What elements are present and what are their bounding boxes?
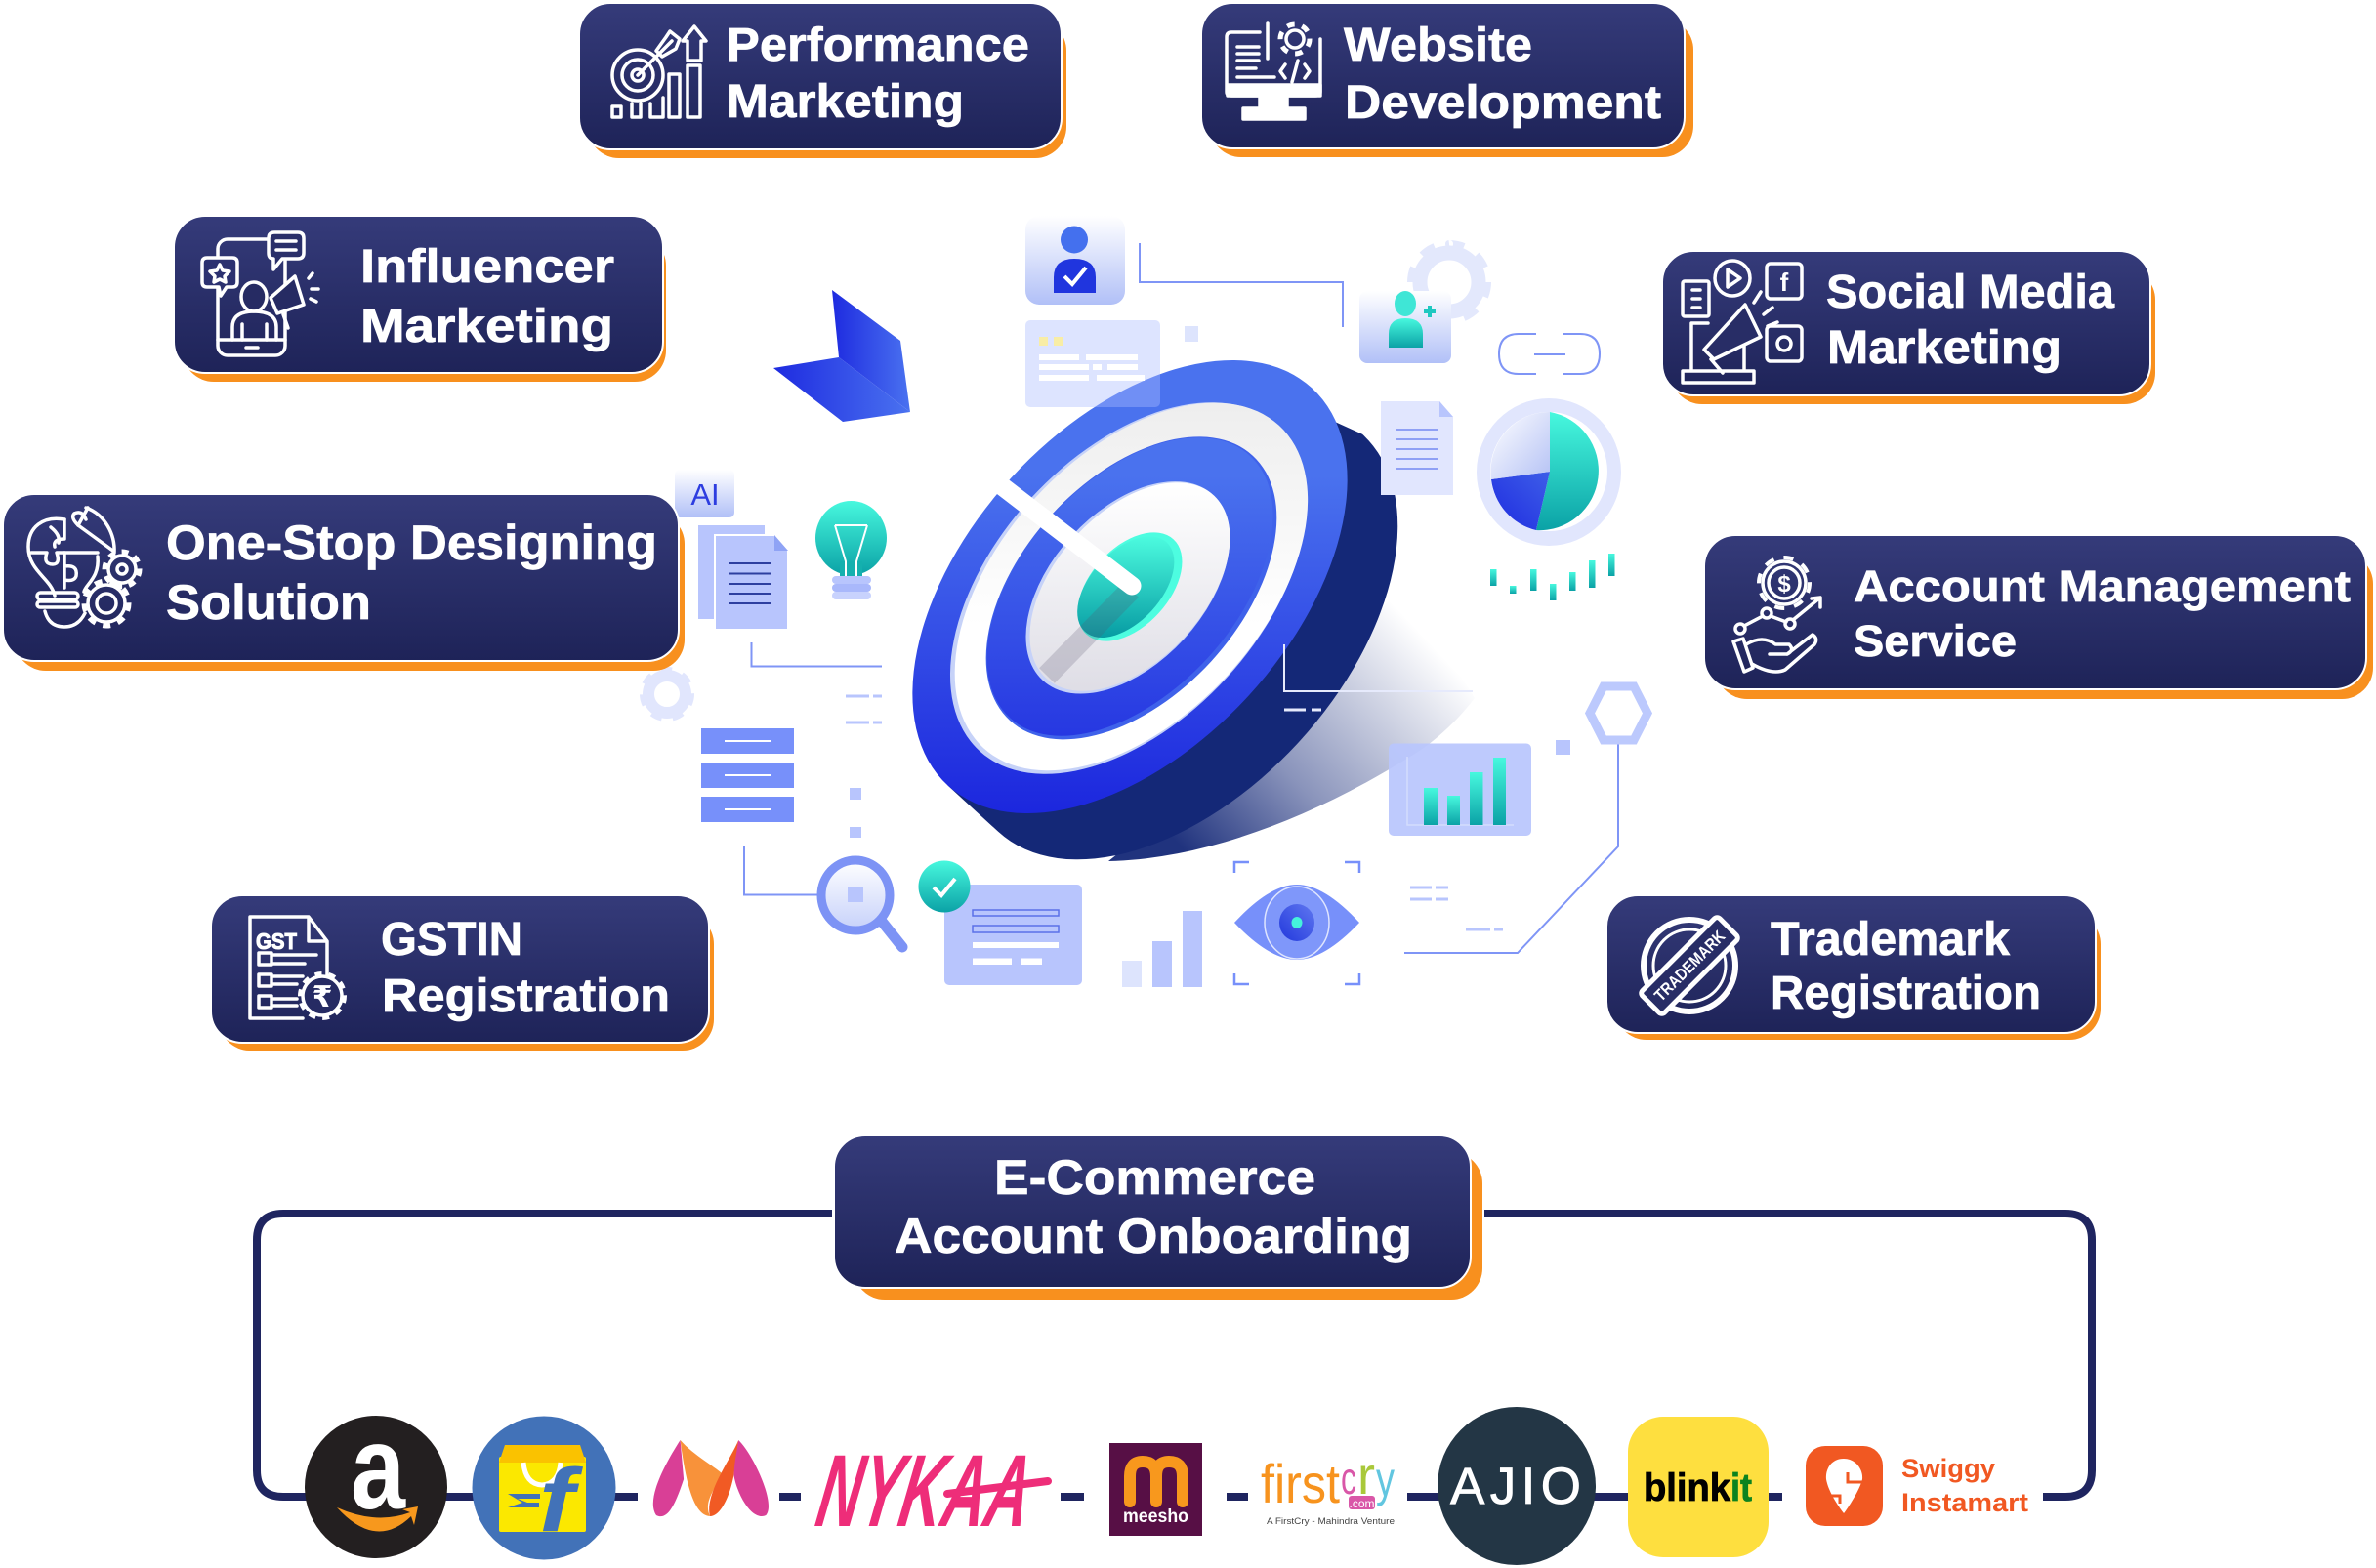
panel: Trademark Registration — [1606, 895, 2101, 1040]
connector lines — [744, 243, 1618, 953]
logo: Meesho — [1109, 1443, 1202, 1536]
heading line 2: Registration — [1771, 968, 2041, 1019]
small teal bars — [1490, 554, 1615, 600]
logo: Amazon: a — [351, 1401, 406, 1534]
panel: Account Management Service — [1704, 535, 2373, 699]
heading: GSTIN — [381, 914, 522, 966]
heading: One-Stop Designing — [166, 516, 657, 570]
small square — [1185, 326, 1198, 342]
panel: E-Commerce Account Onboarding — [834, 1135, 1482, 1300]
pie chart — [1477, 398, 1621, 546]
icon: hexagon — [1590, 686, 1647, 740]
icon: phone influencer with megaphone — [202, 232, 318, 355]
info card overlapping target — [1025, 320, 1160, 407]
logo: Nykaa: NYKAA — [810, 1434, 1041, 1548]
icon: magnifier — [821, 860, 902, 947]
heading line 2: Marketing — [1827, 322, 2062, 374]
logo: Amazon — [305, 1401, 447, 1558]
AI chip: AI — [690, 477, 720, 512]
logo: Flipkart: f — [539, 1451, 584, 1550]
icon: check badge — [918, 861, 971, 912]
heading: Social Media — [1826, 267, 2114, 318]
logo: FirstCry: r — [1357, 1447, 1375, 1506]
AI chip — [675, 470, 734, 517]
logo: Swiggy Instamart: Instamart — [1901, 1488, 2028, 1517]
icon: verified user card — [1025, 216, 1125, 305]
logo: FirstCry: .com — [1349, 1497, 1375, 1510]
form card — [944, 885, 1082, 985]
icon: eye with focus brackets — [1234, 862, 1359, 984]
icon: account growth in hand — [1733, 557, 1820, 672]
panel: Social Media Marketing — [1662, 251, 2155, 404]
gear top right — [1411, 244, 1487, 320]
logo: AJIO: AJIO — [1450, 1458, 1581, 1515]
logo: Myntra — [653, 1440, 769, 1516]
panel: One-Stop Designing Solution — [3, 494, 685, 671]
heading: E-Commerce — [994, 1150, 1315, 1205]
panel: Website Development — [1201, 3, 1693, 157]
logo: Swiggy Instamart — [1806, 1446, 2028, 1526]
panel: GSTIN Registration — [211, 895, 714, 1051]
icon: monitor with code — [1227, 23, 1320, 119]
heading line 2: Registration — [382, 970, 670, 1022]
logo: Nykaa — [810, 1434, 1048, 1548]
icon: social megaphone — [1683, 261, 1802, 383]
logo: Meesho: meesho — [1123, 1506, 1188, 1527]
connector frame around e-commerce logos — [257, 1214, 2092, 1497]
heading: Account Management — [1854, 561, 2351, 611]
panel: Performance Marketing — [579, 3, 1066, 158]
folded blue book — [773, 290, 910, 422]
icon: trademark stamp: TRADEMARK — [1650, 927, 1730, 1005]
icon: document right — [1381, 401, 1453, 495]
central target illustration — [829, 279, 1481, 940]
icon symbol: dollar: $ — [1777, 571, 1791, 598]
arrow shaft shadow — [1047, 590, 1131, 676]
icon symbol: rupee: ₹ — [313, 981, 332, 1013]
heading line 2: Account Onboarding — [895, 1209, 1412, 1263]
logo: Swiggy Instamart: Swiggy — [1901, 1454, 1995, 1483]
icon: add user card — [1359, 291, 1451, 363]
stacked list bars — [701, 728, 794, 822]
heading: Trademark — [1771, 914, 2010, 966]
heading line 2: Solution — [166, 575, 371, 630]
logo: Flipkart — [473, 1416, 615, 1560]
small gear left — [643, 670, 691, 719]
bar chart card — [1389, 744, 1531, 836]
small squares — [850, 740, 1570, 838]
heading: Website — [1344, 20, 1532, 71]
icon: chain link — [1499, 334, 1600, 374]
icon: GST document with rupee seal — [250, 917, 345, 1018]
white callout line on target — [1284, 644, 1473, 710]
icon: documents left — [698, 525, 788, 630]
logo: Blinkit: blink — [1644, 1466, 1731, 1509]
target cast shadow — [1108, 598, 1475, 861]
heading line 2: Development — [1345, 77, 1661, 129]
small column chart — [1122, 911, 1202, 987]
logo: FirstCry — [1261, 1447, 1395, 1527]
icon: target and growth bars — [612, 26, 706, 117]
logo: FirstCry: A FirstCry - Mahindra Venture — [1267, 1516, 1395, 1527]
logo: FirstCry: c — [1341, 1453, 1356, 1504]
heading line 2: Service — [1854, 616, 2017, 666]
logo: Blinkit: it — [1730, 1466, 1752, 1509]
icon letter: f: f — [1780, 268, 1789, 297]
logo: Blinkit — [1628, 1417, 1769, 1557]
target disc — [829, 279, 1481, 940]
logo: FirstCry: y — [1376, 1452, 1395, 1506]
logo: FirstCry: first — [1261, 1453, 1340, 1514]
heading: Performance — [727, 20, 1029, 71]
icon label: GST: GST — [256, 928, 297, 954]
heading line 2: Marketing — [360, 301, 613, 352]
heading: Influencer — [360, 241, 614, 293]
heading line 2: Marketing — [727, 76, 964, 128]
panel: Influencer Marketing — [174, 216, 666, 382]
dashes — [846, 696, 1503, 929]
arrow shaft slot — [993, 479, 1132, 586]
logo: AJIO — [1438, 1407, 1596, 1565]
icon: light bulb — [815, 501, 887, 599]
icon: puzzle bulb with gears — [28, 508, 140, 627]
